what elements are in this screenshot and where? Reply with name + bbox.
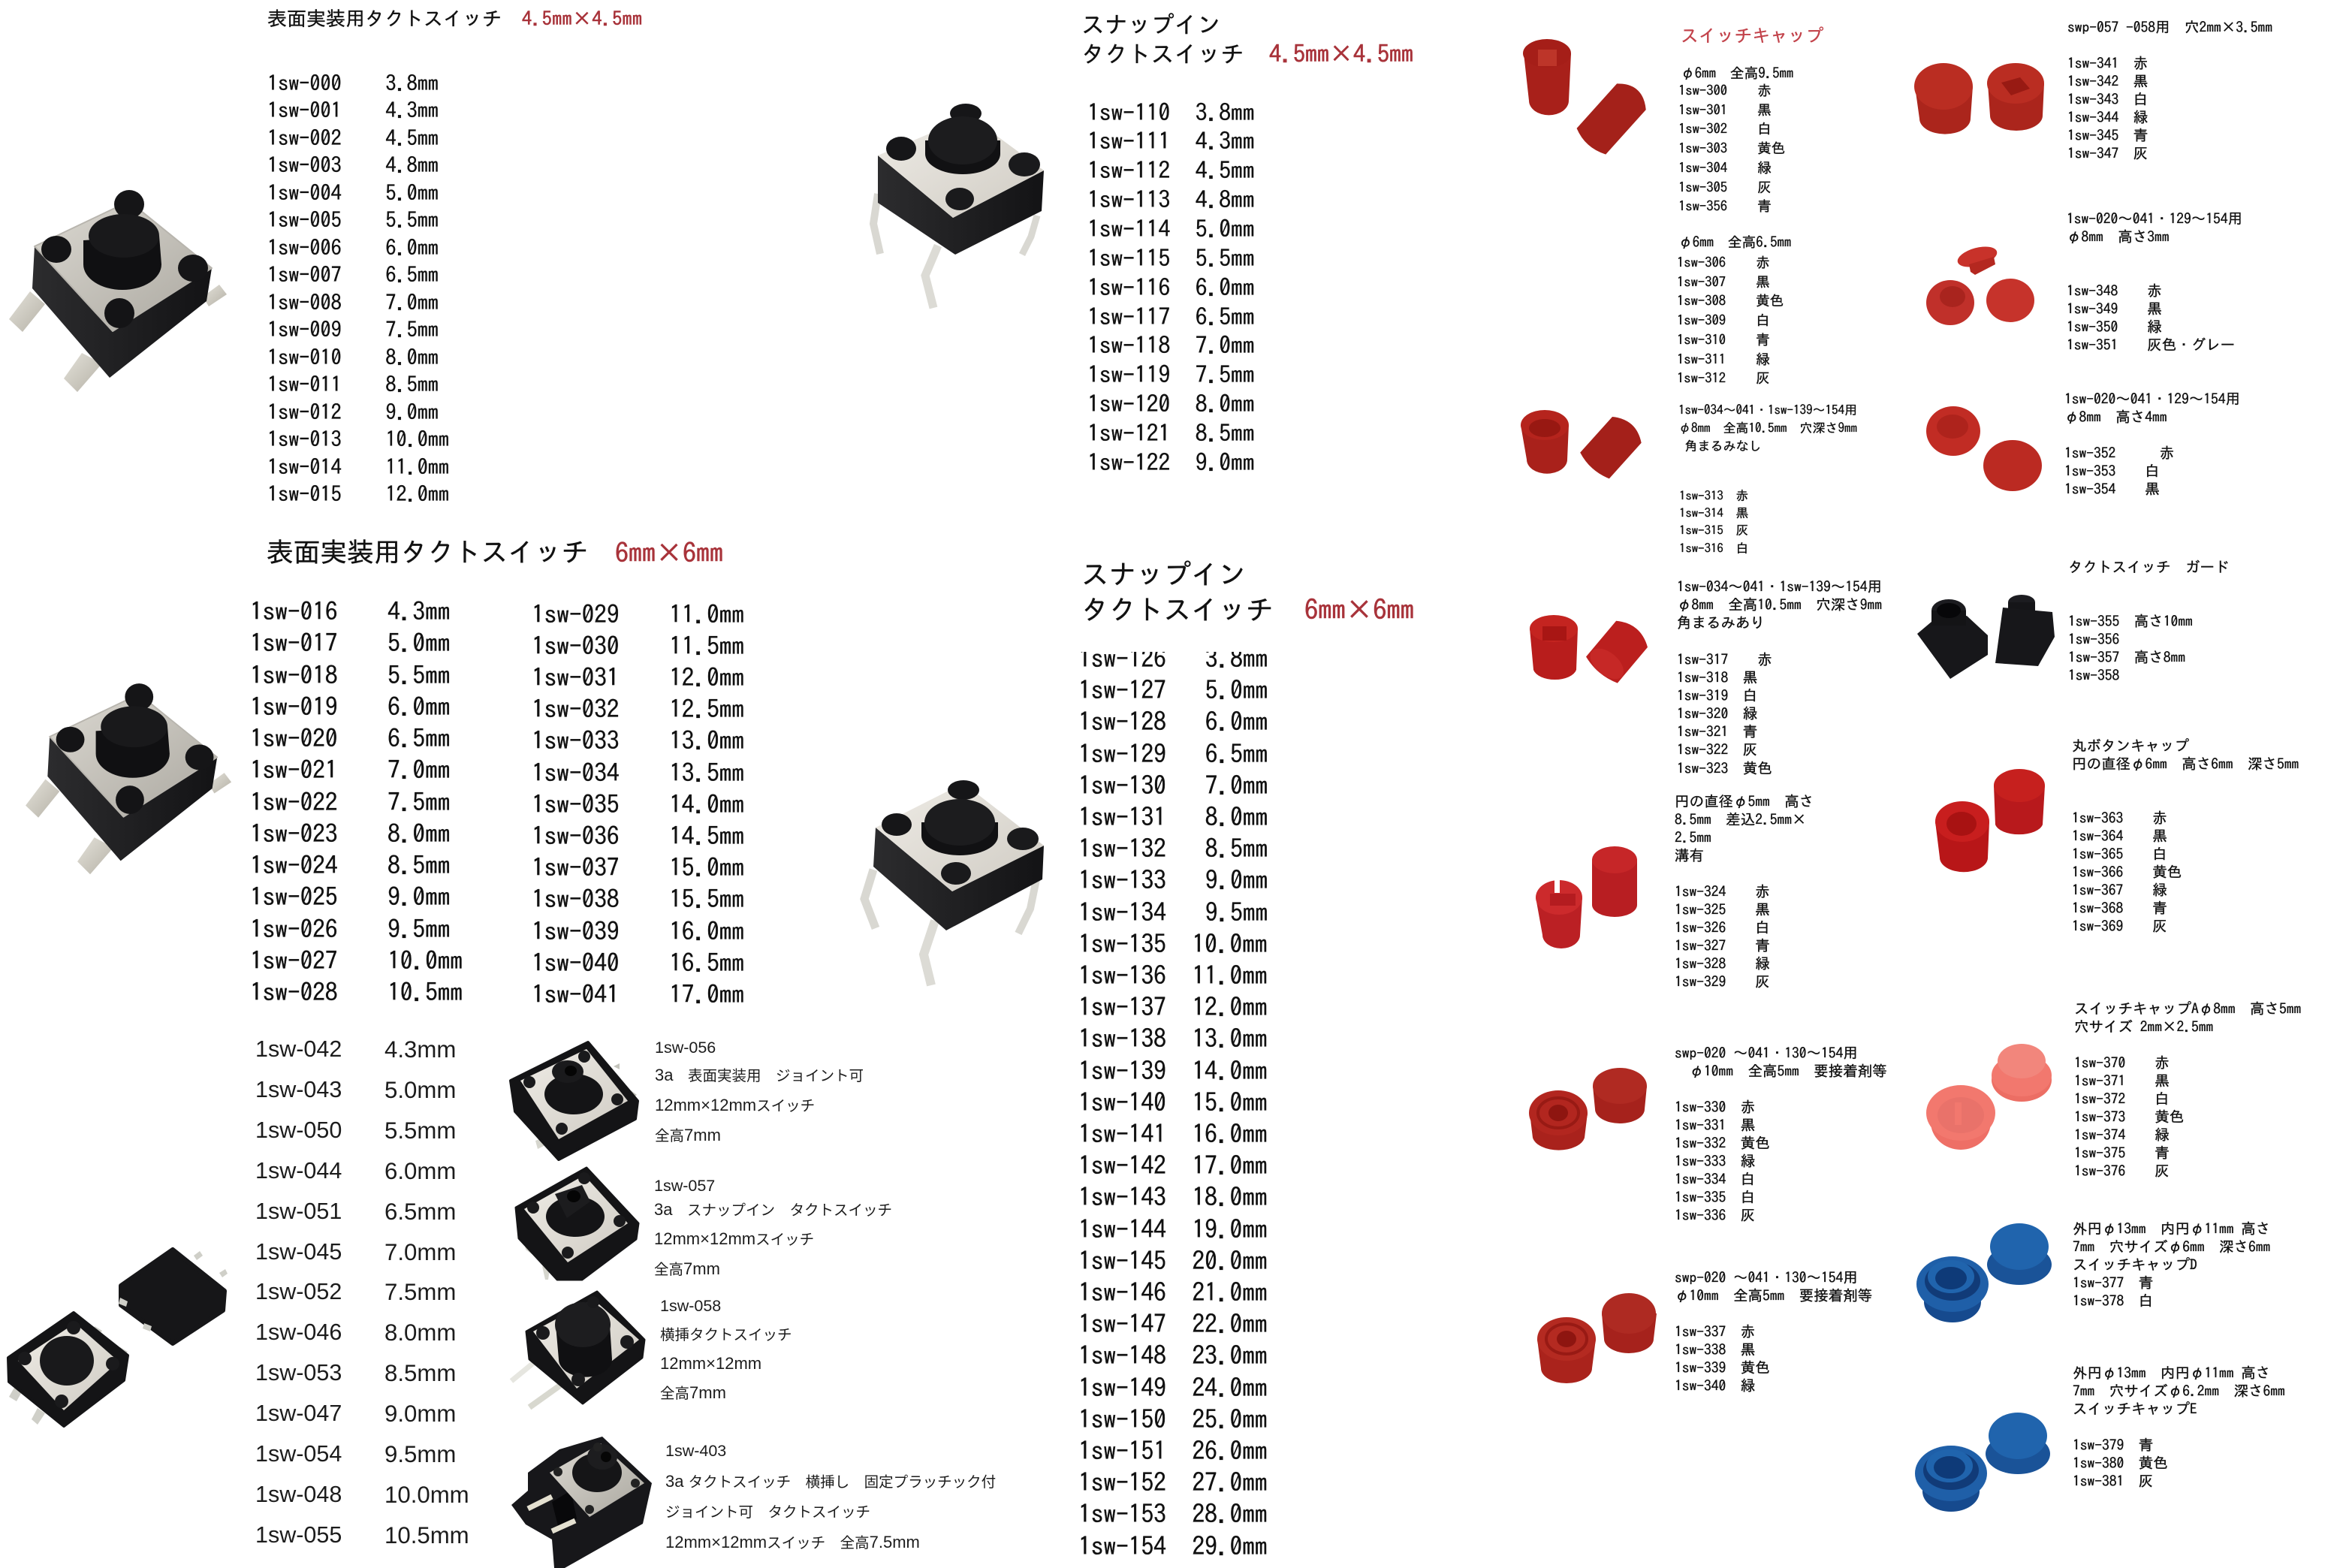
block: round button caps 363-369: 丸ボタンキャップ 円の直径φ6mm 高さ6mm 深さ5mm 1sw-363 赤 1sw-364 黒 1sw-365 白 1sw-366 黄色 1sw-367 緑 1sw-368 青 1sw-369 灰 [2072, 739, 2299, 933]
block: switch guard 355-358: タクトスイッチ ガード 1sw-355 高さ10mm 1sw-356 1sw-357 高さ8mm 1sw-358 [2068, 560, 2229, 683]
list: SMD 6mm parts column 2: 1sw-029 11.0mm 1sw-030 11.5mm 1sw-031 12.0mm 1sw-032 12.5mm 1sw-033 13.0mm 1sw-034 13.5mm 1sw-035 14.0mm 1sw-036 14.5mm 1sw-037 15.0mm 1sw-038 15.5mm 1sw-039 16.0mm 1sw-040 16.5mm 1sw-041 17.0mm [532, 601, 744, 1006]
heading: switch caps: スイッチキャップ [1681, 26, 1823, 44]
block: cap E 379-381: 外円φ13mm 内円φ11mm 高さ 7mm 穴サイズφ6.2mm 深さ6mm スイッチキャップE 1sw-379 青 1sw-380 黄色 1sw-381 灰 [2073, 1366, 2285, 1488]
block: caps 352-354: 1sw-020～041・129～154用 φ8mm 高さ4mm 1sw-352 赤 1sw-353 白 1sw-354 黒 [2064, 392, 2240, 496]
photo: SMD 6mm tact switch [26, 683, 231, 874]
photo: 1sw-057 switch [516, 1168, 638, 1280]
text: 1sw-058: 1sw-058 横挿タクトスイッチ 12mm×12mm 全高7mm [660, 1297, 792, 1402]
block: caps 337-340: swp-020 ～041・130～154用 φ10mm 全高5mm 要接着剤等 1sw-337 赤 1sw-338 黒 1sw-339 黄色 1sw-340 緑 [1675, 1271, 1872, 1393]
photo: SMD 4.5mm tact switch [9, 190, 227, 392]
block: cap A 370-376: スイッチキャップAφ8mm 高さ5mm 穴サイズ 2mm×2.5mm 1sw-370 赤 1sw-371 黒 1sw-372 白 1sw-373 黄色 1sw-374 緑 1sw-375 青 1sw-376 灰 [2074, 1002, 2301, 1178]
photo: cap φ6 height 9.5 [1523, 39, 1652, 158]
photo: snap-in 6mm tact switch [864, 780, 1044, 985]
photo: 1sw-403 switch [511, 1437, 652, 1568]
photo: cap for 057 and 058 [1914, 63, 2044, 134]
photo: 1sw-056 switch [511, 1042, 638, 1159]
photo: cap φ8 without rounded corners [1521, 410, 1646, 481]
caption: φ8mm without rounded corners: 1sw-034～041・1sw-139～154用 φ8mm 全高10.5mm 穴深さ9mm 角まるみなし [1678, 404, 1857, 453]
photo: round button cap [1935, 769, 2045, 872]
photo: switch guard [1917, 595, 2055, 679]
photo: pink cap A [1926, 1044, 2052, 1150]
photo: cap φ8 with rounded corners [1530, 615, 1652, 686]
heading size: 4.5mm × 4.5mm: 4.5mm×4.5mm [522, 9, 642, 29]
photo: cap φ10 second pair [1537, 1293, 1657, 1383]
list: SMD 4.5mm parts: 1sw-000 3.8mm 1sw-001 4.3mm 1sw-002 4.5mm 1sw-003 4.8mm 1sw-004 5.0mm 1sw-005 5.5mm 1sw-006 6.0mm 1sw-007 6.5mm 1sw-008 7.0mm 1sw-009 7.5mm 1sw-010 8.0mm 1sw-011 8.5mm 1sw-012 9.0mm 1sw-013 10.0mm 1sw-014 11.0mm 1sw-015 12.0mm [267, 72, 449, 505]
heading: SMD 4.5mm: 表面実装用タクトスイッチ [267, 9, 502, 29]
heading: snap-in 6mm: スナップイン タクトスイッチ [1081, 561, 1274, 623]
photo: 1sw-058 switch [511, 1292, 644, 1407]
photo: cap φ8 height 4 [1926, 406, 2042, 491]
heading: SMD 6mm: 表面実装用タクトスイッチ [267, 539, 588, 565]
heading size: snap-in 4.5mm × 4.5mm: 4.5mm×4.5mm [1269, 41, 1413, 65]
block: caps 330-336: swp-020 ～041・130～154用 φ10mm 全高5mm 要接着剤等 1sw-330 赤 1sw-331 黒 1sw-332 黄色 1sw-333 緑 1sw-334 白 1sw-335 白 1sw-336 灰 [1675, 1046, 1887, 1223]
photo: 12mm SMD switch front and back [8, 1250, 228, 1426]
caption: φ6mm height 9.5mm: φ6mm 全高9.5mm [1681, 66, 1793, 80]
photo: cap φ8 height 3 [1926, 243, 2034, 325]
caption: φ6mm height 6.5mm: φ6mm 全高6.5mm [1678, 235, 1791, 249]
heading size: snap-in 6mm × 6mm: 6mm×6mm [1304, 596, 1414, 623]
photo: snap-in 4.5mm tact switch [873, 104, 1044, 308]
block: caps 348-351: 1sw-020～041・129～154用 φ8mm 高さ3mm 1sw-348 赤 1sw-349 黒 1sw-350 緑 1sw-351 灰色・グレー [2067, 212, 2242, 351]
list: 12mm heights: 4.3mm 5.0mm 5.5mm 6.0mm 6.5mm 7.0mm 7.5mm 8.0mm 8.5mm 9.0mm 9.5mm 10.0mm 10.5mm [384, 1036, 469, 1548]
photo: cap φ5 with groove [1536, 846, 1637, 948]
block: caps 317-323: 1sw-034～041・1sw-139～154用 φ8mm 全高10.5mm 穴深さ9mm 角まるみあり 1sw-317 赤 1sw-318 黒 1sw-319 白 1sw-320 緑 1sw-321 青 1sw-322 灰 1sw-323 黄色 [1677, 580, 1882, 776]
list: snap-in 4.5mm parts: 1sw-110 3.8mm 1sw-111 4.3mm 1sw-112 4.5mm 1sw-113 4.8mm 1sw-114 5.0mm 1sw-115 5.5mm 1sw-116 6.0mm 1sw-117 6.5mm 1sw-118 7.0mm 1sw-119 7.5mm 1sw-120 8.0mm 1sw-121 8.5mm 1sw-122 9.0mm [1087, 100, 1254, 474]
list: caps 313-316: 1sw-313 赤 1sw-314 黒 1sw-315 灰 1sw-316 白 [1679, 490, 1748, 555]
heading size: 6mm × 6mm: 6mm×6mm [615, 539, 723, 566]
block: caps 324-329: 円の直径φ5mm 高さ 8.5mm 差込2.5mm× 2.5mm 溝有 1sw-324 赤 1sw-325 黒 1sw-326 白 1sw-327 青 1sw-328 緑 1sw-329 灰 [1675, 795, 1814, 989]
photo: blue cap D [1916, 1223, 2052, 1322]
block: cap D 377-378: 外円φ13mm 内円φ11mm 高さ 7mm 穴サイズφ6mm 深さ6mm スイッチキャップD 1sw-377 青 1sw-378 白 [2073, 1222, 2270, 1308]
heading: snap-in 4.5mm: スナップイン タクトスイッチ [1081, 13, 1244, 65]
list: SMD 6mm parts column 1: 1sw-016 4.3mm 1sw-017 5.0mm 1sw-018 5.5mm 1sw-019 6.0mm 1sw-020 6.5mm 1sw-021 7.0mm 1sw-022 7.5mm 1sw-023 8.0mm 1sw-024 8.5mm 1sw-025 9.0mm 1sw-026 9.5mm 1sw-027 10.0mm 1sw-028 10.5mm [250, 599, 463, 1004]
text: 1sw-403: 1sw-403 3a タクトスイッチ 横挿し 固定プラッチック付 ジョイント可 タクトスイッチ 12mm×12mmスイッチ 全高7.5mm [665, 1442, 996, 1551]
text: 1sw-056: 1sw-056 3a 表面実装用 ジョイント可 12mm×12mmスイッチ 全高7mm [655, 1039, 864, 1144]
list: 12mm part numbers: 1sw-042 1sw-043 1sw-050 1sw-044 1sw-051 1sw-045 1sw-052 1sw-046 1sw-053 1sw-047 1sw-054 1sw-048 1sw-055 [255, 1036, 342, 1548]
block: caps 341-347: swp-057 -058用 穴2mm×3.5mm 1sw-341 赤 1sw-342 黒 1sw-343 白 1sw-344 緑 1sw-345 青 1sw-347 灰 [2067, 20, 2272, 161]
list: snap-in 6mm parts: 1sw-126 3.8mm 1sw-127 5.0mm 1sw-128 6.0mm 1sw-129 6.5mm 1sw-130 7.0mm 1sw-131 8.0mm 1sw-132 8.5mm 1sw-133 9.0mm 1sw-134 9.5mm 1sw-135 10.0mm 1sw-136 11.0mm 1sw-137 12.0mm 1sw-138 13.0mm 1sw-139 14.0mm 1sw-140 15.0mm 1sw-141 16.0mm 1sw-142 17.0mm 1sw-143 18.0mm 1sw-144 19.0mm 1sw-145 20.0mm 1sw-146 21.0mm 1sw-147 22.0mm 1sw-148 23.0mm 1sw-149 24.0mm 1sw-150 25.0mm 1sw-151 26.0mm 1sw-152 27.0mm 1sw-153 28.0mm 1sw-154 29.0mm [1078, 647, 1268, 1559]
list: caps 300-356: 1sw-300 赤 1sw-301 黒 1sw-302 白 1sw-303 黄色 1sw-304 緑 1sw-305 灰 1sw-356 青 [1678, 84, 1785, 213]
photo: blue cap E [1915, 1413, 2050, 1512]
list: caps 306-312: 1sw-306 赤 1sw-307 黒 1sw-308 黄色 1sw-309 白 1sw-310 青 1sw-311 緑 1sw-312 灰 [1677, 256, 1784, 385]
text: 1sw-057: 1sw-057 3a スナップイン タクトスイッチ 12mm×12mmスイッチ 全高7mm [654, 1177, 892, 1278]
photo: cap φ10 first pair [1529, 1068, 1647, 1150]
